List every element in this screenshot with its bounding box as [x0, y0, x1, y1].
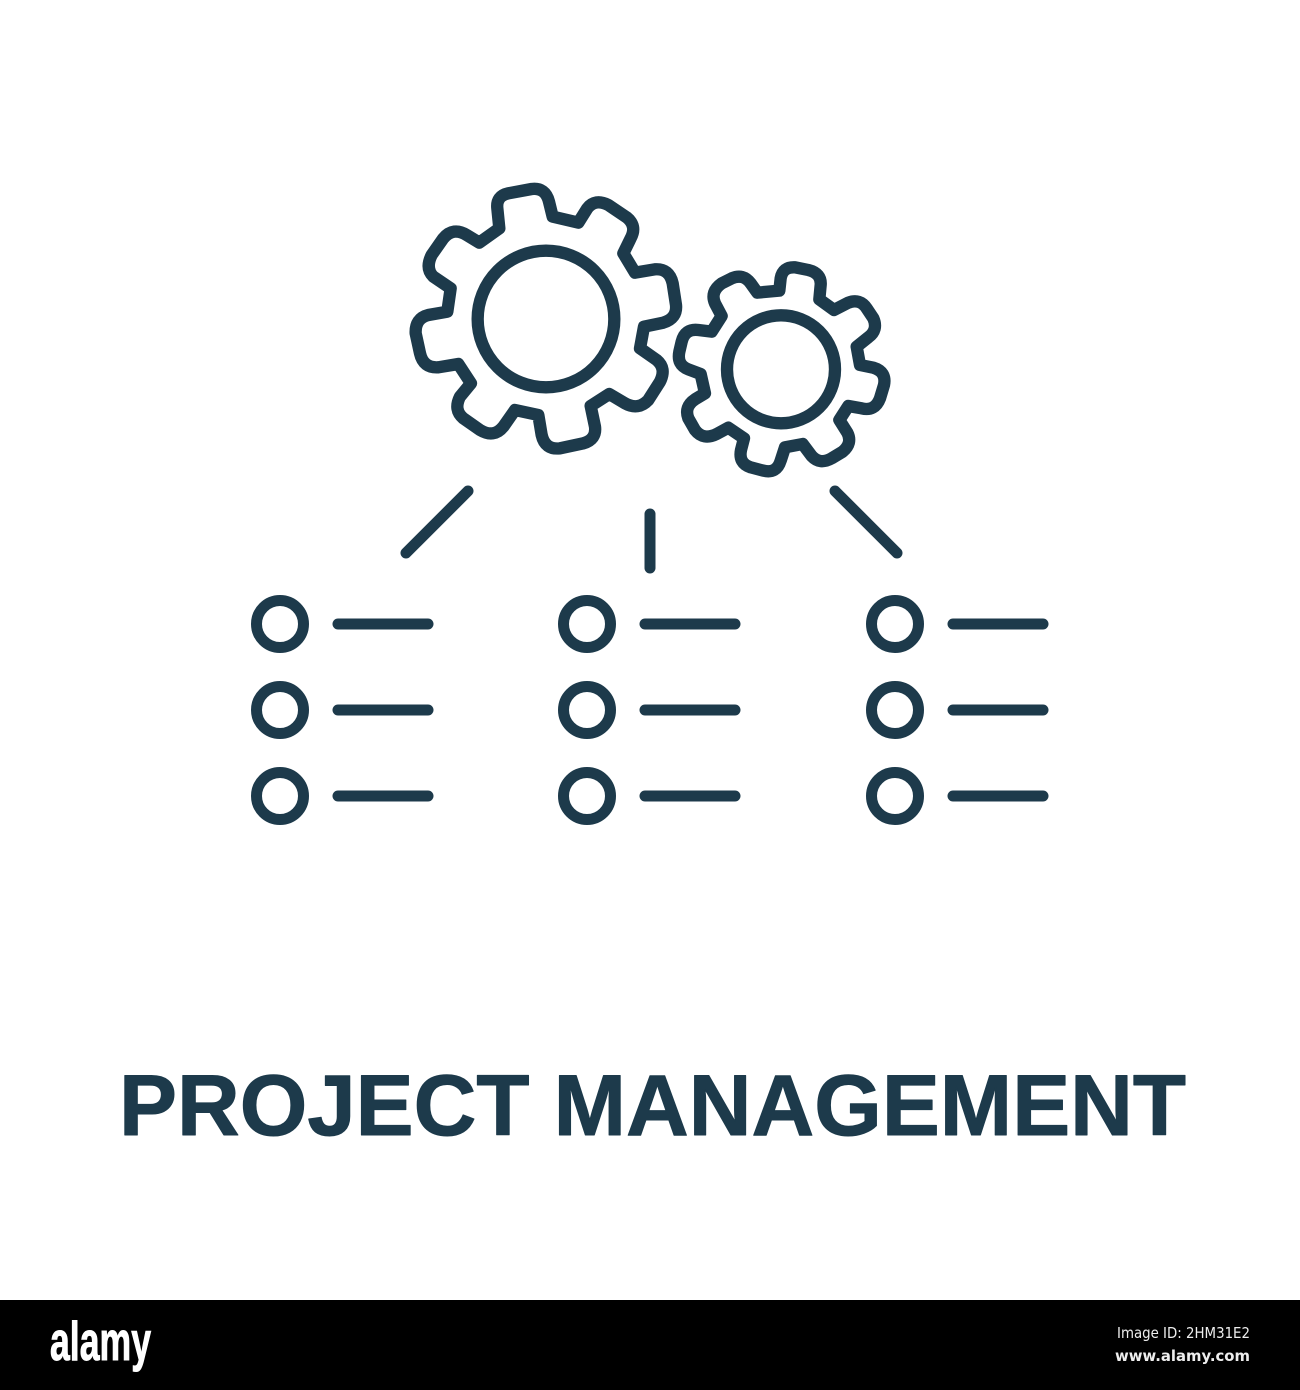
list: left column [256, 600, 428, 820]
connector: left [406, 491, 468, 553]
icon: large gear [416, 189, 676, 448]
footer bar [0, 1300, 1300, 1390]
list: middle column [564, 600, 735, 820]
website: www.alamy.com [1115, 1347, 1250, 1365]
image id: Image ID: 2HM31E2 [1117, 1324, 1250, 1342]
icon: small gear [679, 267, 884, 471]
connector: middle [644, 514, 656, 568]
list: right column [872, 600, 1043, 820]
connector: right [835, 491, 897, 553]
logo: alamy: alamy [50, 1310, 151, 1372]
title: PROJECT MANAGEMENT [119, 1058, 1186, 1154]
